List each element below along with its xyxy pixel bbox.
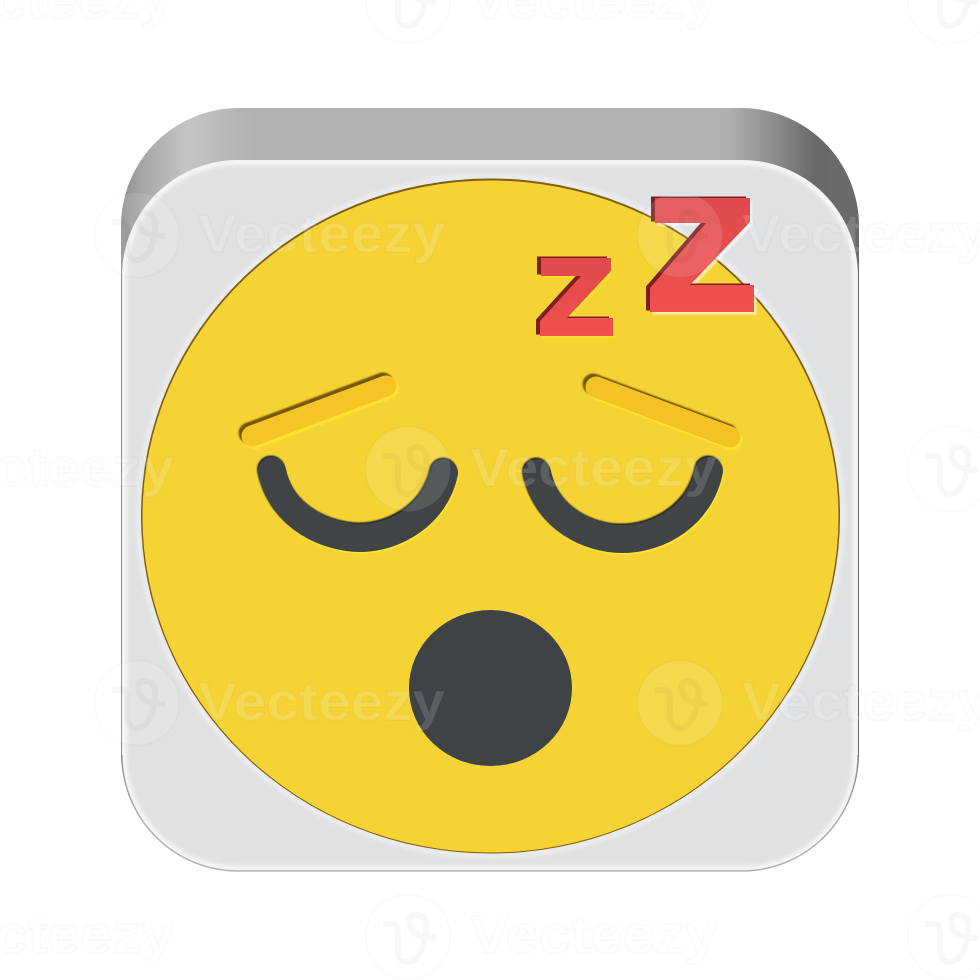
watermark: repeated Vecteezy marks: Vecteezy — [742, 204, 980, 264]
icon: right closed eye — [536, 470, 710, 540]
watermark: repeated Vecteezy marks: Vecteezy — [198, 204, 445, 264]
icon: left closed eye — [271, 470, 445, 540]
icon: large Z — [646, 196, 756, 314]
watermark: repeated Vecteezy marks: Vecteezy — [470, 905, 717, 965]
watermark: repeated Vecteezy marks: Vecteezy — [198, 672, 445, 732]
icon: right eyebrow — [593, 384, 732, 440]
illustration: sleeping emoji icon — [121, 108, 859, 872]
watermark: repeated Vecteezy marks: Vecteezy — [470, 438, 717, 498]
icon: small z — [536, 256, 615, 338]
icon: left eyebrow — [249, 383, 388, 438]
watermark: repeated Vecteezy marks: Vecteezy — [742, 672, 980, 732]
icon: open mouth — [409, 610, 572, 766]
icon: back side of the tile — [121, 108, 859, 871]
icon: yellow face — [138, 176, 842, 856]
panel: front of the tile — [122, 160, 858, 871]
